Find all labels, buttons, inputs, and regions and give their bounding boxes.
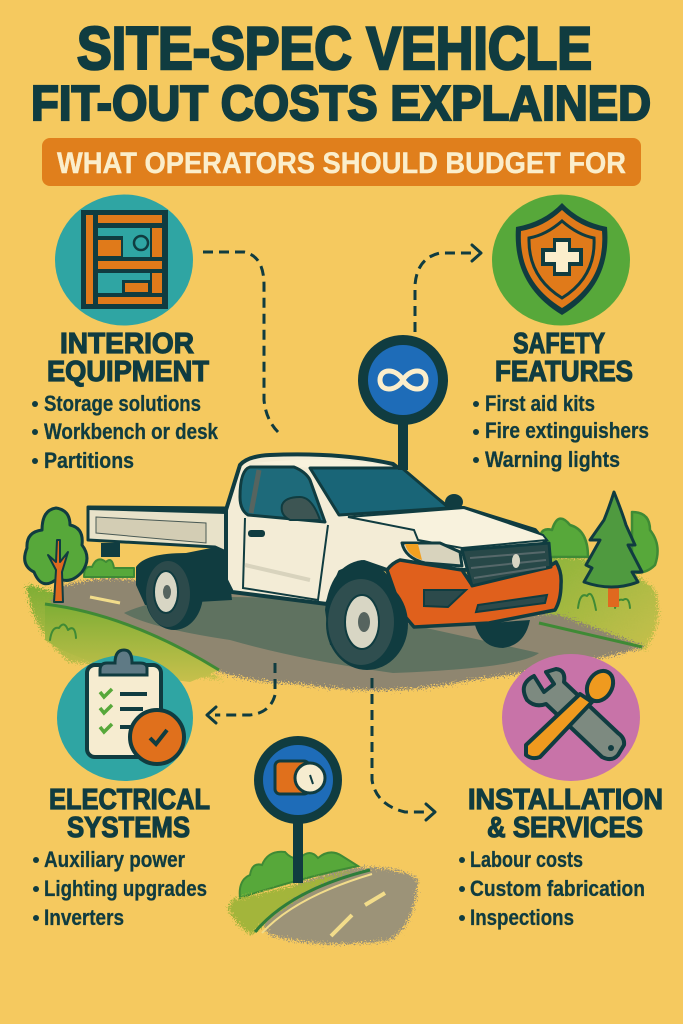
heading: interior equipment [47,328,209,388]
title [31,15,651,131]
list: electrical systems items: Lighting upgrades [44,876,207,901]
truck tray chassis [101,543,232,605]
list: installation and services items: Custom fabrication [470,876,645,901]
right trees and bushes [539,492,658,607]
sign: infinity on post [358,335,448,470]
heading: electrical systems: SYSTEMS [67,812,190,844]
door lines and handle [243,518,328,600]
subtitle banner [42,138,641,186]
title: SITE-SPEC VEHICLE [77,15,592,82]
arrow: installation connector [372,678,435,820]
title: FIT-OUT COSTS EXPLAINED [31,77,651,131]
seat headrest [282,497,320,520]
heading: interior equipment: EQUIPMENT [47,356,209,388]
front wheel [326,578,408,670]
heading: installation and services: & SERVICES [487,812,643,844]
heading: safety features: FEATURES [495,356,633,388]
icon: interior equipment layout [55,194,193,326]
fog lamp and air intake [424,590,466,607]
list: safety features items: Warning lights [485,447,620,472]
arrow: interior equipment connector [203,252,278,432]
rear wheel [145,558,203,630]
mirror [445,494,463,510]
list: electrical systems items: Auxiliary power [44,847,185,872]
heading: installation and services: INSTALLATION [468,784,663,816]
heading: electrical systems: ELECTRICAL [49,784,210,816]
heading: interior equipment: INTERIOR [60,328,194,360]
far front wheel [475,620,530,648]
list: interior equipment items: Workbench or desk [44,419,219,444]
list: electrical systems items: Inverters [44,905,124,930]
list: interior equipment items: Storage solutions [44,391,201,416]
front wheel arch and bumper [325,560,406,645]
list: safety features items: First aid kits [485,391,595,416]
hood [348,508,547,548]
icon: safety shield [492,194,630,326]
list: installation and services items: Labour costs [470,847,583,872]
heading: electrical systems [49,784,210,844]
side windows [240,467,325,522]
list: electrical systems items [33,847,207,930]
windshield [310,468,449,515]
arrow: safety features connector [415,245,481,332]
left tree [25,508,134,602]
truck flatbed [88,507,226,552]
list: installation and services items [459,847,645,930]
heading: safety features [495,328,633,388]
list: installation and services items: Inspections [470,905,574,930]
icon: electrical systems checklist [57,650,193,781]
road scene behind truck [26,557,658,690]
roof highlight [254,460,390,468]
headlight [402,543,462,566]
list: safety features items: Fire extinguishers [485,418,649,443]
list: interior equipment items [32,391,219,473]
list: interior equipment items: Partitions [44,448,134,473]
heading: safety features: SAFETY [513,328,605,360]
icon: installation tools [502,654,640,781]
grille [462,543,551,586]
arrow: electrical systems connector [207,663,275,723]
sign: gauge on post with road [228,736,418,944]
subtitle banner: WHAT OPERATORS SHOULD BUDGET FOR [57,147,626,180]
cab body [226,454,551,604]
truck [88,454,561,670]
heading: installation and services [468,784,663,844]
list: safety features items [473,391,649,472]
